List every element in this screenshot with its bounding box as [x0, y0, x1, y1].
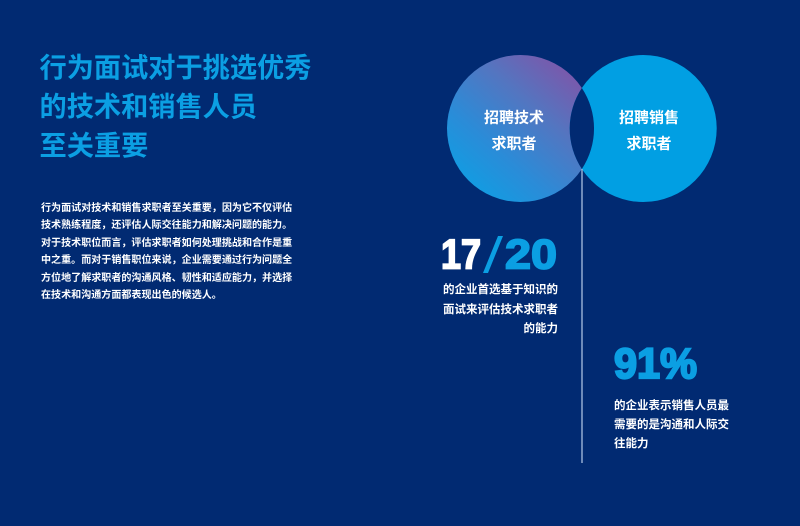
- title: [40, 52, 311, 160]
- title: 至关重要: [40, 130, 148, 160]
- intro text block: 行为面试对技术和销售求职者至关重要，因为它不仅评估: [41, 203, 292, 214]
- venn overlap lens: [570, 88, 594, 169]
- caption: 91%: 往能力: [614, 438, 648, 450]
- title: 的技术和销售人员: [40, 90, 257, 122]
- intro text block: 技术熟练程度，还评估人际交往能力和解决问题的能力。: [41, 220, 292, 231]
- intro text block: [41, 202, 292, 301]
- vertical connector line: [581, 169, 583, 463]
- stat: 91%: 91%: [614, 340, 697, 388]
- venn circle: sales candidates: 求职者: [626, 134, 672, 152]
- title: 行为面试对于挑选优秀: [40, 52, 311, 82]
- intro text block: 方位地了解求职者的沟通风格、韧性和适应能力，并选择: [41, 273, 292, 284]
- intro text block: 对于技术职位而言，评估求职者如何处理挑战和合作是重: [41, 238, 292, 249]
- stat: 17/20: 20: [505, 230, 557, 278]
- caption: 17/20: [443, 283, 558, 335]
- caption: 17/20: 的企业首选基于知识的: [443, 284, 558, 296]
- venn circle: sales candidates: 招聘销售: [619, 108, 679, 126]
- stat: 17/20: [441, 230, 557, 278]
- venn circle: technical candidates: 求职者: [491, 134, 537, 152]
- venn circle: sales candidates: [570, 55, 717, 202]
- venn circle: technical candidates: [447, 55, 594, 202]
- caption: 91%: [614, 399, 729, 450]
- venn circle: technical candidates: 招聘技术: [484, 108, 544, 126]
- intro text block: 中之重。而对于销售职位来说，企业需要通过行为问题全: [41, 255, 292, 266]
- intro text block: 在技术和沟通方面都表现出色的候选人。: [41, 290, 222, 301]
- caption: 91%: 需要的是沟通和人际交: [614, 419, 729, 431]
- caption: 17/20: 的能力: [524, 323, 558, 335]
- caption: 91%: 的企业表示销售人员最: [614, 400, 729, 412]
- stat: 17/20: 17: [441, 230, 481, 278]
- caption: 17/20: 面试来评估技术求职者: [443, 304, 558, 316]
